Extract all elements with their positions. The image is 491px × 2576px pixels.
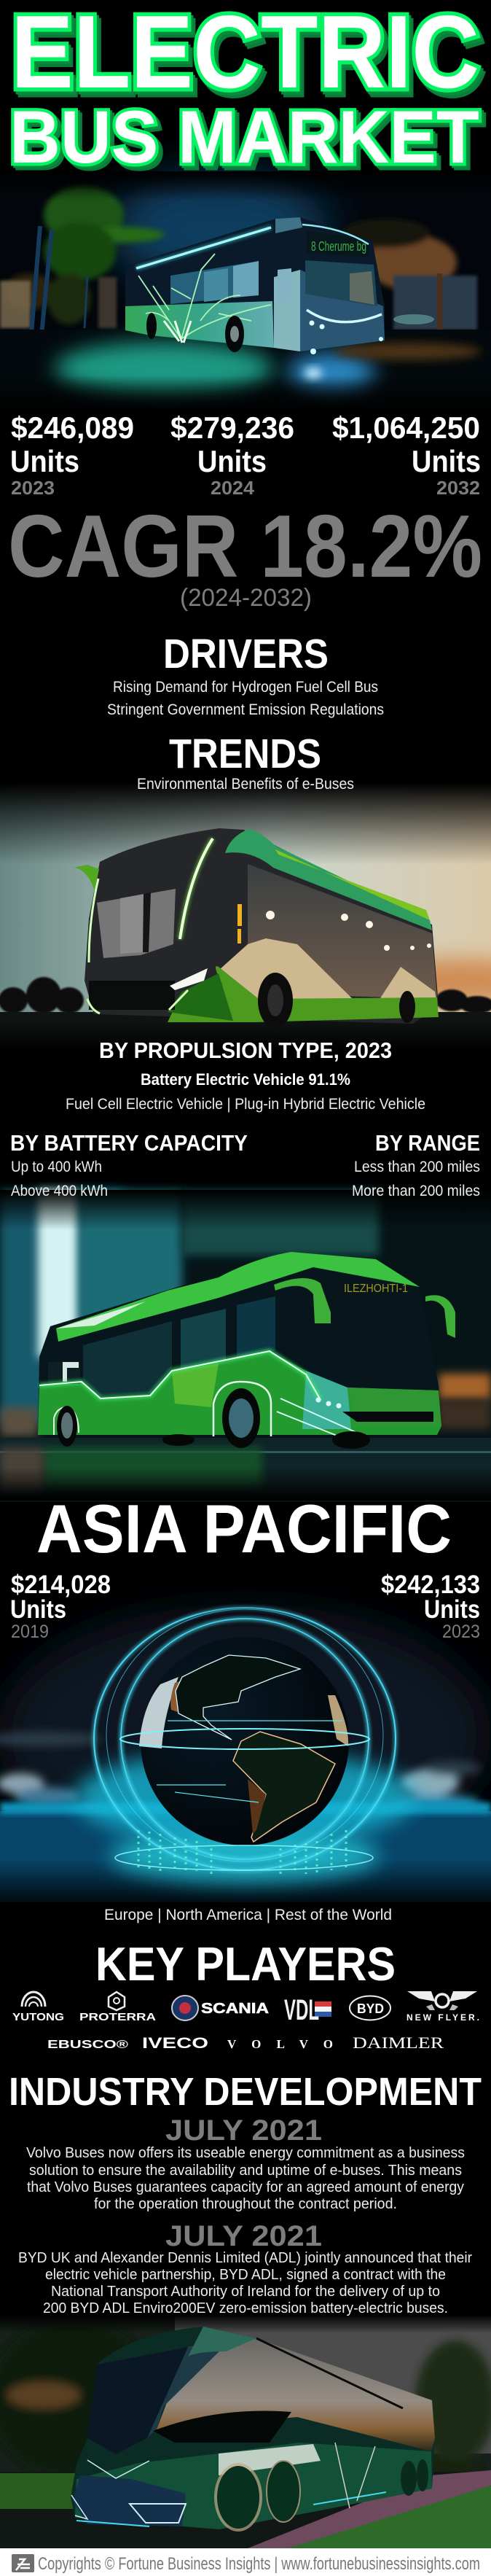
development: July 2021 Volvo: solution to ensure the availability and uptime of e-buses. This means xyxy=(29,2162,462,2179)
development: July 2021 BYD: BYD UK and Alexander Dennis Limited (ADL) jointly announced that their xyxy=(18,2249,472,2266)
lower green body xyxy=(38,1351,441,1435)
grass and road xyxy=(0,2472,491,2548)
stat: 2024 units: $279,236 xyxy=(170,410,294,445)
heading: by battery capacity: Up to 400 kWh xyxy=(11,1159,102,1175)
leading propulsion segment: Battery Electric Vehicle 91.1% xyxy=(141,1070,350,1089)
image: futuristic green bus in park xyxy=(0,2315,491,2548)
neon light strips xyxy=(180,838,213,939)
stat: 2023: 2023 xyxy=(442,1622,480,1642)
heading: by range: BY RANGE xyxy=(375,1131,480,1156)
development: July 2021 Volvo xyxy=(26,2114,465,2212)
stat: 2019: Units xyxy=(10,1595,66,1624)
heading: by battery capacity xyxy=(10,1131,248,1199)
heading: key players: KEY PLAYERS xyxy=(95,1937,396,1991)
stat: 2019 xyxy=(10,1571,111,1642)
stat: 2023 units xyxy=(10,410,134,499)
windows xyxy=(83,1321,172,1396)
image: glowing globe xyxy=(0,1568,491,1918)
clouds xyxy=(0,1732,481,1810)
stat: 2023: $242,133 xyxy=(381,1571,480,1599)
stat: 2024 units: Units xyxy=(197,444,267,478)
wheels xyxy=(222,1388,260,1448)
bus xyxy=(71,2327,435,2532)
equatorial rings xyxy=(120,1721,369,1802)
outer rings xyxy=(94,1608,396,1870)
heading: by propulsion type: BY PROPULSION TYPE, 2023 xyxy=(99,1038,392,1063)
heading: by range: Less than 200 miles xyxy=(354,1159,480,1175)
stat: 2032 units: 2032 xyxy=(436,477,480,499)
logo: Proterra xyxy=(79,1992,156,2023)
heading: by battery capacity: Above 400 kWh xyxy=(11,1183,108,1199)
bus xyxy=(38,1252,455,1449)
logo: Scania xyxy=(172,1996,269,2020)
destination sign: ILEZHOHTI-1 xyxy=(344,1283,408,1295)
bus xyxy=(125,217,385,354)
stat: 2032 units xyxy=(332,410,481,499)
development: July 2021 Volvo: Volvo Buses now offers its useable energy commitment as a business xyxy=(26,2144,465,2161)
heading: by range: More than 200 miles xyxy=(352,1183,480,1199)
stat: 2024 units: 2024 xyxy=(211,477,255,499)
wheels xyxy=(225,316,244,352)
logo: BYD: BYD xyxy=(357,2001,384,2016)
logo: New Flyer xyxy=(406,1991,479,2023)
logo: Daimler: DAIMLER xyxy=(353,2034,444,2052)
development: July 2021 BYD: JULY 2021 xyxy=(165,2220,322,2252)
stat: 2019: $214,028 xyxy=(11,1571,111,1599)
image: electric bus at night xyxy=(0,171,491,413)
development: July 2021 BYD: 200 BYD ADL Enviro200EV zero-emission battery-electric buses. xyxy=(43,2300,448,2316)
footer xyxy=(0,2548,491,2576)
title line 2: BUS MARKET xyxy=(9,96,479,179)
heading: drivers: DRIVERS xyxy=(163,631,329,677)
sphere xyxy=(141,1637,349,1845)
development: July 2021 BYD xyxy=(18,2220,472,2316)
stat: 2024 units xyxy=(170,410,294,499)
heading: trends: TRENDS xyxy=(169,731,321,777)
tree: green left xyxy=(4,186,164,324)
development: July 2021 Volvo: JULY 2021 xyxy=(165,2114,322,2147)
stat: 2023 units: 2023 xyxy=(11,477,55,499)
logo: Volvo: VOLVO xyxy=(227,2037,333,2051)
CAGR period: (2024-2032) xyxy=(180,584,312,612)
trees xyxy=(0,2319,491,2479)
tree line xyxy=(0,977,491,1013)
mirrors xyxy=(274,1278,331,1323)
heading: Asia Pacific: ASIA PACIFIC xyxy=(36,1490,452,1567)
stat: 2019: 2019 xyxy=(11,1622,49,1642)
green mirror xyxy=(74,865,99,891)
light lines xyxy=(71,2460,149,2519)
development: July 2021 BYD: National Transport Authority of Ireland for the delivery of up to xyxy=(51,2283,440,2300)
development: July 2021 Volvo: that Volvo Buses guarantees capacity for an agreed amount of energy xyxy=(27,2179,465,2195)
wheels xyxy=(214,2463,262,2532)
drivers list: Rising Demand for Hydrogen Fuel Cell Bus xyxy=(113,679,378,696)
logo: Ebusco: EBUSCO® xyxy=(47,2039,128,2051)
development: July 2021 BYD: electric vehicle partnership, BYD ADL, signed a contract with the xyxy=(45,2266,446,2283)
destination sign: 8 Cherume bg xyxy=(311,239,366,254)
logo: Iveco: IVECO xyxy=(142,2035,208,2052)
South America outline xyxy=(233,1732,335,1842)
logo: Yutong xyxy=(12,1992,64,2023)
stat: 2032 units: $1,064,250 xyxy=(332,410,480,445)
window lights xyxy=(266,911,431,951)
wheels xyxy=(258,973,293,1028)
tree: brown right xyxy=(342,219,457,290)
logo: New Flyer: NEW FLYER. xyxy=(406,2012,479,2023)
trends list: Environmental Benefits of e-Buses xyxy=(137,776,354,793)
other propulsion segments: Fuel Cell Electric Vehicle | Plug-in Hybrid Electric Vehicle xyxy=(66,1096,425,1113)
title: ELECTRIC BUS MARKET xyxy=(9,0,484,183)
base ring and data streams xyxy=(115,1830,373,1874)
heading: by battery capacity: BY BATTERY CAPACITY xyxy=(10,1131,248,1156)
buildings xyxy=(0,273,477,330)
ground xyxy=(0,330,491,412)
logo: Yutong: YUTONG xyxy=(12,2011,64,2023)
road xyxy=(0,1012,491,1050)
heading: by range xyxy=(352,1131,480,1199)
logo: Fortune Business Insights xyxy=(12,2554,34,2572)
stat: 2023: Units xyxy=(424,1595,480,1624)
image: green and cream bus at dusk xyxy=(0,783,491,1051)
drivers list xyxy=(107,679,384,718)
headlight xyxy=(307,310,382,322)
title line 2: BUS MARKET xyxy=(9,96,479,179)
horizon glow xyxy=(0,1811,491,1902)
drivers list: Stringent Government Emission Regulations xyxy=(107,701,384,718)
logo: VDL: VDL xyxy=(284,1994,319,2026)
bus xyxy=(74,828,439,1028)
development: July 2021 Volvo: for the operation throughout the contract period. xyxy=(94,2195,397,2212)
North America outline xyxy=(176,1655,300,1740)
lightning tree graphic xyxy=(138,254,271,343)
logo: Scania: SCANIA xyxy=(201,2001,269,2017)
wet road xyxy=(0,1438,491,1501)
street poles xyxy=(30,226,87,352)
lower body xyxy=(75,2443,432,2529)
neon outline xyxy=(39,1351,321,1400)
image: green neon bus xyxy=(0,1190,491,1502)
logo: Proterra: PROTERRA xyxy=(79,2011,156,2023)
stat: 2023 xyxy=(381,1571,480,1642)
other regions: Europe | North America | Rest of the World xyxy=(104,1907,392,1923)
stat: 2023 units: Units xyxy=(10,444,79,478)
stat: 2023 units: $246,089 xyxy=(11,410,134,445)
stat: 2032 units: Units xyxy=(412,444,481,478)
logo: BYD xyxy=(350,1996,390,2020)
